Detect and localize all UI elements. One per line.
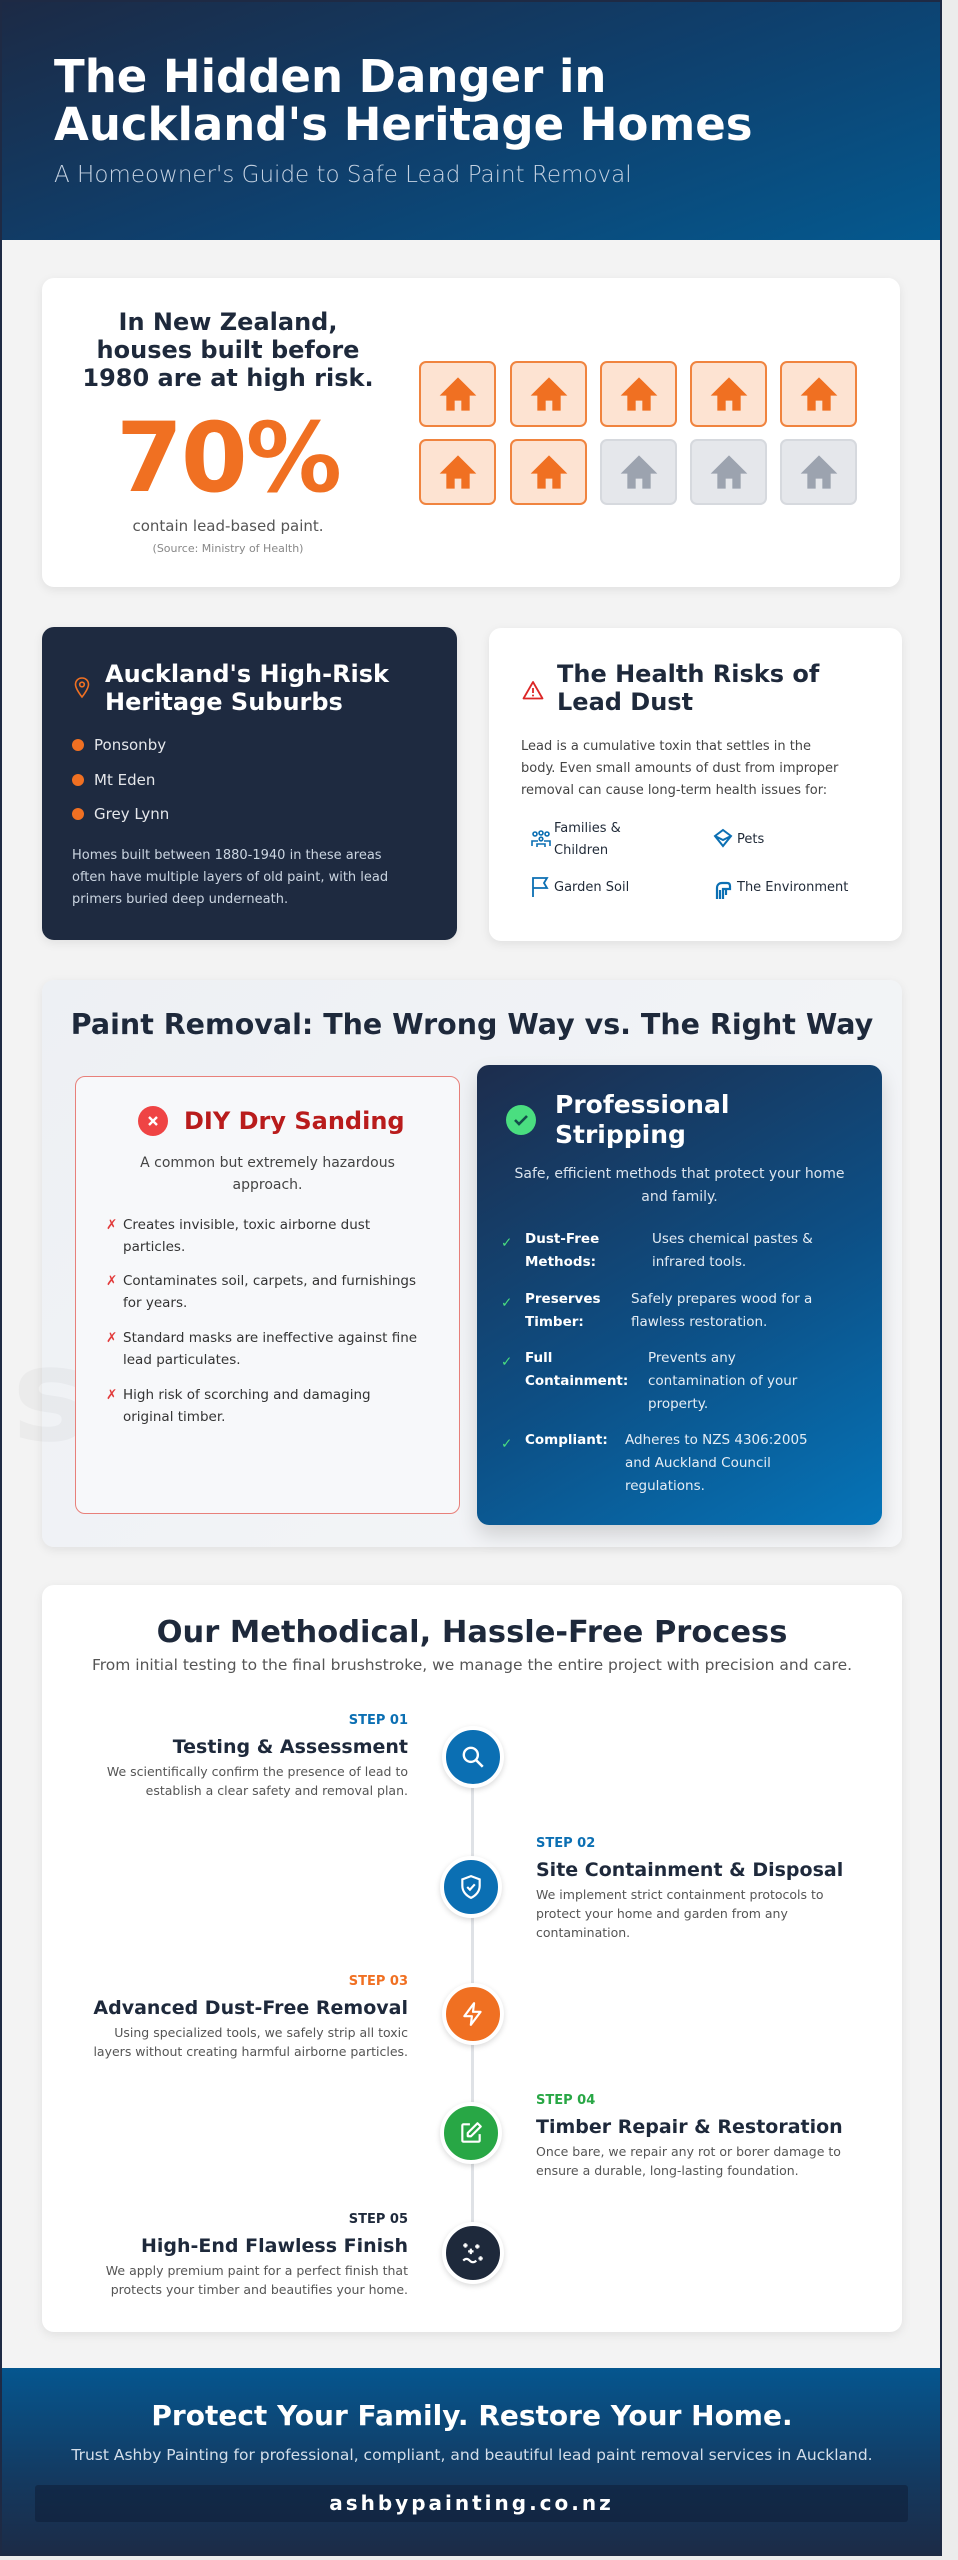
step 3	[93, 1974, 506, 2059]
icon: search	[442, 1726, 504, 1788]
stat heading: In New Zealand,	[119, 308, 337, 336]
step 4: ensure a durable, long-lasting foundation.	[536, 2163, 799, 2178]
pro list: Full	[525, 1350, 552, 1366]
subtitle: A Homeowner's Guide to Safe Lead Paint Removal	[54, 162, 632, 188]
health heading: Lead Dust	[557, 688, 693, 716]
icon: map pin	[74, 677, 90, 698]
DIY bullets: for years.	[123, 1294, 187, 1310]
DIY bullets: Standard masks are ineffective against fine	[123, 1330, 417, 1346]
step 3: STEP 03	[349, 1974, 408, 1989]
step 4: STEP 04	[536, 2093, 595, 2108]
suburb list: Ponsonby	[94, 736, 166, 754]
icon: sparkles	[442, 2222, 504, 2284]
suburbs note: Homes built between 1880-1940 in these areas	[72, 848, 382, 863]
footer subtitle: Trust Ashby Painting for professional, compliant, and beautiful lead paint removal services in Auckland.	[71, 2446, 873, 2464]
pro heading: Professional	[555, 1090, 729, 1119]
pro list: Compliant:	[525, 1432, 608, 1448]
pro list: Safely prepares wood for a	[631, 1291, 812, 1307]
suburb list: Grey Lynn	[94, 805, 169, 823]
step 2: We implement strict containment protocols to	[536, 1887, 824, 1902]
title: The Hidden Danger in	[54, 50, 606, 103]
panel: comparison	[42, 980, 902, 1547]
pro list: Adheres to NZS 4306:2005	[625, 1432, 808, 1448]
DIY bullets: ✗	[106, 1273, 117, 1289]
suburbs heading: Heritage Suburbs	[105, 688, 343, 716]
suburbs note: primers buried deep underneath.	[72, 892, 288, 907]
risk list	[531, 821, 848, 899]
step 4: Once bare, we repair any rot or borer damage to	[536, 2144, 841, 2159]
DIY bullets: High risk of scorching and damaging	[123, 1387, 371, 1403]
process subtitle: From initial testing to the final brushstroke, we manage the entire project with precision and care.	[92, 1656, 852, 1674]
stat heading	[82, 308, 374, 392]
suburbs note: often have multiple layers of old paint, with lead	[72, 870, 388, 885]
panel: suburbs	[42, 627, 457, 940]
footer title: Protect Your Family. Restore Your Home.	[151, 2399, 793, 2432]
step 1: STEP 01	[349, 1713, 408, 1728]
pro list: Prevents any	[648, 1350, 736, 1366]
health heading	[557, 660, 820, 716]
stat heading: houses built before	[97, 336, 359, 364]
step 5: We apply premium paint for a perfect finish that	[106, 2263, 408, 2278]
house grid	[419, 361, 857, 505]
suburbs heading: Auckland's High-Risk	[105, 660, 389, 688]
health paragraph: Lead is a cumulative toxin that settles in the	[521, 739, 811, 754]
icon: edit	[440, 2102, 502, 2164]
pro list: Preserves	[525, 1291, 601, 1307]
big number: 70%	[116, 402, 340, 514]
pro list: infrared tools.	[652, 1254, 746, 1270]
risk list: Children	[554, 843, 608, 858]
DIY bullets: original timber.	[123, 1408, 225, 1424]
pro list: Uses chemical pastes &	[652, 1231, 813, 1247]
icon: environment	[716, 882, 732, 899]
health paragraph: removal can cause long-term health issues for:	[521, 783, 827, 798]
panel: process	[42, 1585, 902, 2332]
DIY bullets: particles.	[123, 1238, 185, 1254]
comparison title: Paint Removal: The Wrong Way vs. The Right Way	[71, 1008, 873, 1041]
pro subtitle	[514, 1166, 845, 1205]
pro subtitle: and family.	[641, 1189, 718, 1205]
pro list: property.	[648, 1396, 708, 1412]
DIY bullets	[106, 1217, 417, 1424]
suburb list: Mt Eden	[94, 771, 155, 789]
header	[2, 2, 942, 240]
panel: DIY	[75, 1076, 460, 1514]
step 4	[438, 2093, 843, 2178]
pro list: Timber:	[525, 1314, 584, 1330]
step 1: We scientifically confirm the presence of lead to	[107, 1764, 408, 1779]
step 5: STEP 05	[349, 2212, 408, 2227]
icon: warning	[522, 681, 544, 700]
step 2: Site Containment & Disposal	[536, 1859, 843, 1881]
icon: green check	[506, 1105, 536, 1135]
pro list: ✓	[501, 1235, 512, 1251]
DIY bullets: ✗	[106, 1387, 117, 1403]
DIY subtitle: A common but extremely hazardous	[140, 1155, 395, 1171]
stat caption: contain lead-based paint.	[132, 517, 324, 535]
icon: red x	[138, 1106, 168, 1136]
risk list: Garden Soil	[554, 880, 629, 895]
pro list: and Auckland Council	[625, 1455, 771, 1471]
DIY subtitle	[140, 1155, 395, 1193]
risk list: Pets	[737, 832, 764, 847]
pro list: ✓	[501, 1295, 512, 1311]
timeline line	[471, 1758, 474, 2254]
step 2	[438, 1836, 843, 1940]
step 5: High-End Flawless Finish	[141, 2235, 408, 2257]
title	[54, 50, 753, 151]
risk list: Families &	[554, 821, 621, 836]
stat heading: 1980 are at high risk.	[82, 364, 374, 392]
pro list: Methods:	[525, 1254, 596, 1270]
suburb list	[72, 736, 169, 823]
step 2: protect your home and garden from any	[536, 1906, 788, 1921]
pro list: regulations.	[625, 1478, 705, 1494]
process title: Our Methodical, Hassle-Free Process	[157, 1615, 787, 1650]
pro list: contamination of your	[648, 1373, 797, 1389]
pro heading	[555, 1090, 729, 1149]
pro list: flawless restoration.	[631, 1314, 767, 1330]
suburbs note	[72, 848, 388, 907]
panel: statistic card	[42, 278, 900, 587]
icon: flag	[532, 877, 548, 897]
step 5	[106, 2212, 506, 2297]
pro list: Dust-Free	[525, 1231, 599, 1247]
DIY subtitle: approach.	[233, 1177, 302, 1193]
health paragraph	[521, 739, 838, 798]
step 1: establish a clear safety and removal plan.	[146, 1783, 408, 1798]
source: (Source: Ministry of Health)	[153, 542, 303, 555]
DIY heading: DIY Dry Sanding	[184, 1107, 405, 1135]
step 3: layers without creating harmful airborne particles.	[93, 2044, 408, 2059]
panel: professional	[477, 1065, 882, 1525]
pro list: Containment:	[525, 1373, 628, 1389]
pro list: ✓	[501, 1354, 512, 1370]
health paragraph: body. Even small amounts of dust from improper	[521, 761, 838, 776]
step 5: protects your timber and beautifies your home.	[111, 2282, 408, 2297]
panel: health risks	[489, 628, 902, 941]
pro list	[501, 1231, 813, 1494]
DIY bullets: Creates invisible, toxic airborne dust	[123, 1217, 370, 1233]
step 1	[107, 1713, 506, 1798]
icon: shield	[440, 1856, 502, 1918]
pro heading: Stripping	[555, 1120, 686, 1149]
health heading: The Health Risks of	[557, 660, 819, 688]
website bar	[35, 2485, 908, 2522]
step 2: STEP 02	[536, 1836, 595, 1851]
DIY bullets: lead particulates.	[123, 1352, 241, 1368]
icon: pets	[714, 828, 732, 848]
suburbs heading	[105, 660, 390, 716]
step 3: Using specialized tools, we safely strip all toxic	[114, 2025, 408, 2040]
pro subtitle: Safe, efficient methods that protect your home	[514, 1166, 845, 1182]
step 3: Advanced Dust-Free Removal	[93, 1997, 408, 2019]
risk list: The Environment	[737, 880, 848, 895]
watermark: s	[12, 1319, 89, 1471]
DIY bullets: Contaminates soil, carpets, and furnishings	[123, 1273, 416, 1289]
DIY bullets: ✗	[106, 1330, 117, 1346]
icon: bolt	[442, 1983, 504, 2045]
step 4: Timber Repair & Restoration	[536, 2116, 843, 2138]
step 1: Testing & Assessment	[173, 1736, 408, 1758]
icon: families	[531, 830, 551, 847]
DIY bullets: ✗	[106, 1217, 117, 1233]
footer	[2, 2368, 942, 2558]
pro list: ✓	[501, 1436, 512, 1452]
step 2: contamination.	[536, 1925, 630, 1940]
website bar: ashbypainting.co.nz	[329, 2491, 614, 2515]
title: Auckland's Heritage Homes	[54, 98, 753, 151]
